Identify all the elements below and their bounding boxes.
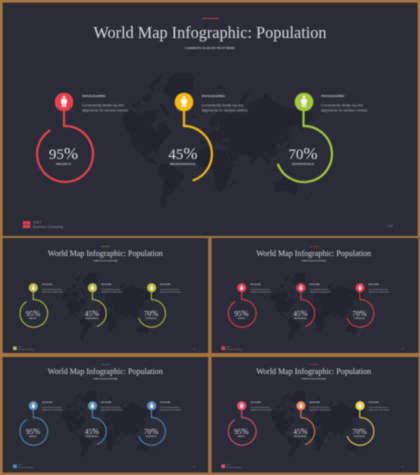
- gauge: 95% project: PROJECT: [56, 162, 71, 166]
- panel: olive variant: Business Consulting: [18, 348, 33, 351]
- panel: red variant: INFOGRAPHIC: [251, 283, 261, 286]
- panel: pink orange yellow variant: [212, 357, 418, 473]
- gauge: 45% professional: PROFESSIONAL: [170, 162, 196, 166]
- panel: pink orange yellow variant: PROFESSIONAL: [294, 435, 307, 438]
- panel: red variant: PROFESSIONAL: [294, 317, 307, 320]
- panel: red variant: Conveniently iterate top-line: [368, 288, 388, 291]
- panel: olive variant: VOLT: [18, 347, 22, 349]
- text block 1: INFOGRAPHIC: [82, 94, 106, 98]
- text block 3: [321, 94, 368, 112]
- gauge: 70% potentials: POTENTIALS: [292, 162, 314, 166]
- text block 3: alignments for window metrics.: [321, 108, 368, 112]
- panel: olive variant: INFOGRAPHIC: [160, 283, 171, 286]
- panel: pink orange yellow variant: INFOGRAPHIC: [251, 401, 261, 404]
- panel: olive variant: [3, 238, 208, 353]
- page number: / 16: [387, 224, 393, 228]
- panel: red variant: VOLT: [226, 347, 231, 349]
- text block 2: [202, 94, 249, 112]
- footer logo and company name: Business Consulting: [33, 225, 63, 229]
- panel: olive variant: 95%: [26, 309, 40, 318]
- panel: red variant: PROJECT: [238, 318, 245, 320]
- text block 2: Conveniently iterate top-line: [202, 104, 244, 108]
- panel: red variant: Business Consulting: [226, 348, 241, 351]
- gauge: 95% project: 95%: [49, 144, 78, 163]
- subtitle: COMPANY SLOGAN TEXT HERE: [185, 46, 235, 50]
- panel: blue variant: 45%: [85, 427, 99, 436]
- panel: red variant: POTENTIALS: [354, 317, 365, 320]
- panel: blue variant: COMPANY SLOGAN TEXT HERE: [93, 378, 118, 381]
- panel: pink orange yellow variant: Conveniently iterate top-line: [309, 406, 329, 409]
- panel: pink orange yellow variant: INFOGRAPHIC: [368, 401, 379, 404]
- panel: main slide: [3, 3, 418, 236]
- panel: blue variant: alignments for window metrics.: [160, 408, 182, 411]
- gauge: 95% project: [37, 93, 93, 182]
- panel: blue variant: Business Consulting: [18, 466, 33, 469]
- panel: olive variant: Conveniently iterate top-line: [160, 288, 180, 291]
- panel: blue variant: POTENTIALS: [146, 435, 157, 438]
- panel: blue variant: PROJECT: [29, 436, 37, 438]
- panel: red variant: / 16: [401, 348, 404, 350]
- text block 3: INFOGRAPHIC: [321, 94, 345, 98]
- text block 3: Conveniently iterate top-line: [321, 104, 363, 108]
- panel: red variant: alignments for window metrics.: [368, 290, 390, 293]
- panel: olive variant: INFOGRAPHIC: [101, 283, 112, 286]
- panel: red variant: INFOGRAPHIC: [368, 283, 379, 286]
- footer logo and company name: VOLT: [33, 220, 42, 224]
- panel: pink orange yellow variant: VOLT: [226, 465, 231, 467]
- panel: pink orange yellow variant: alignments for window metrics.: [309, 408, 331, 411]
- panel: blue variant: INFOGRAPHIC: [101, 401, 112, 404]
- panel: blue variant: Conveniently iterate top-line: [42, 406, 62, 409]
- panel: pink orange yellow variant: INFOGRAPHIC: [309, 401, 320, 404]
- text block 2: INFOGRAPHIC: [202, 94, 226, 98]
- panel: pink orange yellow variant: 45%: [293, 427, 308, 436]
- panel: red variant: Conveniently iterate top-line: [251, 288, 270, 291]
- panel: red variant: alignments for window metrics.: [309, 290, 331, 293]
- panel: red variant: Conveniently iterate top-line: [309, 288, 329, 291]
- panel: red variant: alignments for window metrics.: [251, 290, 272, 293]
- panel: olive variant: PROJECT: [29, 318, 37, 320]
- panel: pink orange yellow variant: World Map Infographic: Population: [256, 367, 372, 376]
- panel: blue variant: / 16: [193, 466, 195, 468]
- panel: olive variant: INFOGRAPHIC: [42, 283, 53, 286]
- panel: blue variant: INFOGRAPHIC: [42, 401, 53, 404]
- panel: red variant: World Map Infographic: Population: [256, 249, 372, 258]
- panel: red variant: 70%: [352, 309, 367, 318]
- panel: pink orange yellow variant: COMPANY SLOGAN TEXT HERE: [301, 378, 326, 381]
- panel: blue variant: INFOGRAPHIC: [160, 401, 171, 404]
- gauge: 45% professional: 45%: [168, 144, 198, 163]
- panel: pink orange yellow variant: PROJECT: [238, 436, 245, 438]
- panel: blue variant: [3, 357, 208, 473]
- text block 2: alignments for window metrics.: [202, 108, 249, 112]
- panel: pink orange yellow variant: / 16: [401, 466, 404, 468]
- panel: red variant: 45%: [293, 309, 308, 318]
- panel: olive variant: / 16: [193, 348, 195, 350]
- panel: olive variant: World Map Infographic: Population: [48, 249, 164, 258]
- panel: pink orange yellow variant: POTENTIALS: [354, 435, 365, 438]
- panel: blue variant: alignments for window metrics.: [42, 408, 64, 411]
- panel: pink orange yellow variant: Conveniently iterate top-line: [368, 406, 388, 409]
- panel: olive variant: alignments for window metrics.: [42, 290, 64, 293]
- panel: olive variant: POTENTIALS: [146, 317, 157, 320]
- panel: pink orange yellow variant: alignments for window metrics.: [368, 408, 390, 411]
- panel: red variant: 95%: [234, 309, 249, 318]
- title: World Map Infographic: Population: [94, 23, 327, 42]
- panel: red variant: [212, 238, 418, 353]
- panel: olive variant: PROFESSIONAL: [86, 317, 98, 320]
- gauge: 70% potentials: 70%: [288, 144, 318, 163]
- panel: blue variant: 95%: [26, 427, 40, 436]
- panel: olive variant: alignments for window metrics.: [101, 290, 123, 293]
- panel: blue variant: 70%: [144, 427, 158, 436]
- panel: pink orange yellow variant: Conveniently iterate top-line: [251, 406, 270, 409]
- panel: blue variant: VOLT: [18, 465, 22, 467]
- panel: pink orange yellow variant: Business Consulting: [226, 466, 241, 469]
- panel: pink orange yellow variant: alignments for window metrics.: [251, 408, 272, 411]
- panel: blue variant: Conveniently iterate top-line: [160, 406, 180, 409]
- footer logo and company name: [23, 220, 63, 229]
- panel: blue variant: PROFESSIONAL: [86, 435, 98, 438]
- panel: olive variant: Conveniently iterate top-line: [101, 288, 121, 291]
- panel: olive variant: 70%: [144, 309, 158, 318]
- panel: pink orange yellow variant: 70%: [352, 427, 367, 436]
- panel: pink orange yellow variant: 95%: [234, 427, 249, 436]
- gauge: 70% potentials: [278, 93, 332, 182]
- text block 1: [82, 94, 129, 112]
- panel: olive variant: 45%: [85, 309, 99, 318]
- panel: blue variant: Conveniently iterate top-line: [101, 406, 121, 409]
- gauge: 45% professional: [168, 93, 212, 180]
- panel: blue variant: World Map Infographic: Population: [48, 367, 164, 376]
- text block 1: alignments for window metrics.: [82, 108, 129, 112]
- text block 1: Conveniently iterate top-line: [82, 104, 124, 108]
- panel: olive variant: COMPANY SLOGAN TEXT HERE: [93, 260, 118, 263]
- panel: olive variant: alignments for window metrics.: [160, 290, 182, 293]
- panel: olive variant: Conveniently iterate top-line: [42, 288, 62, 291]
- panel: red variant: COMPANY SLOGAN TEXT HERE: [301, 260, 326, 263]
- panel: red variant: INFOGRAPHIC: [309, 283, 320, 286]
- panel: blue variant: alignments for window metrics.: [101, 408, 123, 411]
